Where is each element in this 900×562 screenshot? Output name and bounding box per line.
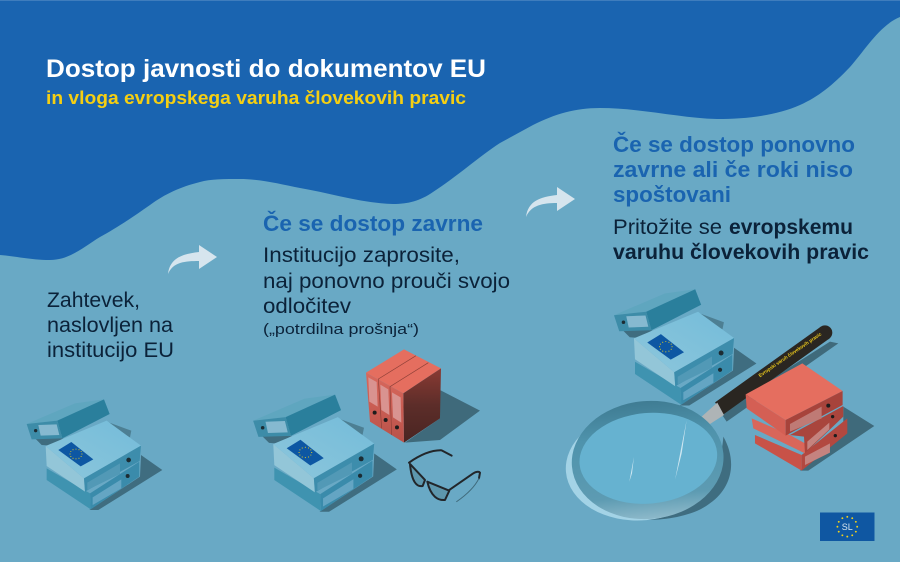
- step 2 text: odločitev: [263, 294, 351, 318]
- red binder stack: [746, 363, 874, 471]
- step 2 heading: Če se dostop zavrne: [263, 211, 483, 236]
- binder stack 2: [253, 395, 397, 512]
- step 3 text: Pritožite se: [613, 215, 722, 239]
- step 1 text: Zahtevek,: [47, 288, 140, 312]
- step 1 text: institucijo EU: [47, 338, 174, 362]
- step 2 text: („potrdilna prošnja“): [263, 321, 419, 338]
- arrow 2: [526, 187, 575, 217]
- subtitle: in vloga evropskega varuha človekovih pravic: [46, 88, 466, 108]
- step 2 text: [263, 243, 510, 338]
- magnifying glass: [561, 325, 838, 527]
- step 3 text: varuhu človekovih pravic: [613, 240, 869, 264]
- dark blue wave header: [0, 0, 900, 260]
- step 3 heading: zavrne ali če roki niso: [613, 157, 853, 182]
- glasses: [409, 450, 480, 502]
- step 2 text: Institucijo zaprosite,: [263, 243, 460, 267]
- EU flag with language code: SL: [842, 522, 853, 532]
- step 2 text: naj ponovno prouči svojo: [263, 269, 510, 293]
- step 3 text: evropskemu: [729, 215, 853, 239]
- top edge line: [0, 0, 900, 1]
- step 3 text: [613, 215, 869, 264]
- step 1 text: naslovljen na: [47, 313, 173, 337]
- handle label: Evropski varuh človekovih pravic: [758, 331, 823, 379]
- binder stack 1: [27, 399, 162, 510]
- title: Dostop javnosti do dokumentov EU: [46, 55, 486, 83]
- binder stack 3: [614, 289, 756, 406]
- step 3 heading: [613, 132, 855, 207]
- red upright binders: [366, 349, 480, 443]
- EU flag with language code: [820, 512, 874, 541]
- step 1 text: [47, 288, 174, 362]
- step 3 heading: spoštovani: [613, 182, 731, 207]
- step 3 heading: Če se dostop ponovno: [613, 132, 855, 157]
- arrow 1: [168, 245, 217, 274]
